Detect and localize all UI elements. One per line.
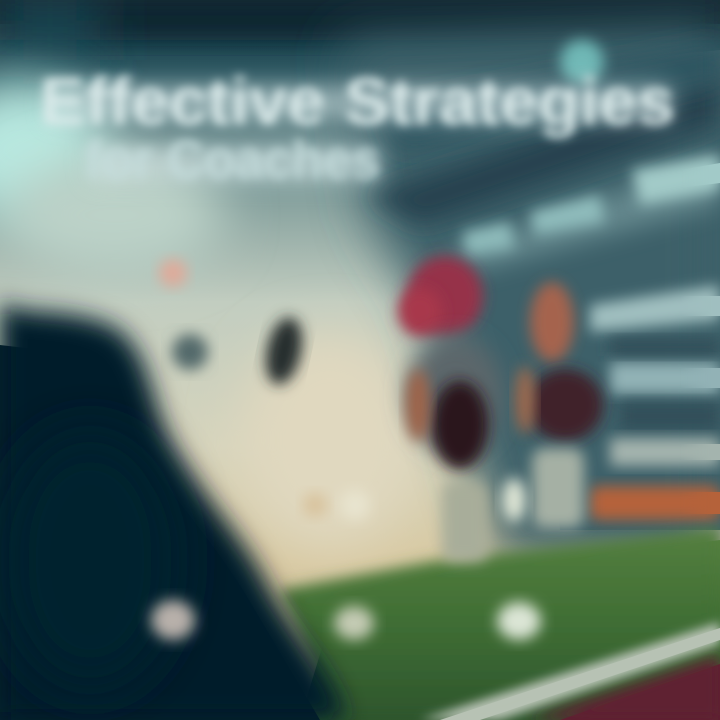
dark silhouette foreground (0, 300, 345, 720)
player figure right (502, 282, 603, 528)
icon: small dark badge (172, 334, 208, 370)
icon: bottom left circle (151, 600, 195, 640)
icon: bottom centre circle (334, 606, 374, 640)
title: Effective Strategies (40, 64, 675, 138)
floating icons (159, 259, 370, 520)
stadium stands (340, 20, 720, 560)
red sideline track (420, 622, 720, 720)
icon: red marker (159, 259, 187, 287)
icon: pale star (340, 490, 370, 520)
bottom icon row (151, 600, 541, 640)
player figure left (398, 256, 503, 562)
icon: dark phone (260, 314, 308, 388)
icon: bottom right circle (497, 602, 541, 640)
green field (280, 528, 720, 720)
title (40, 64, 675, 190)
title: for Coaches (85, 130, 380, 190)
icon: tan marker (303, 493, 327, 517)
